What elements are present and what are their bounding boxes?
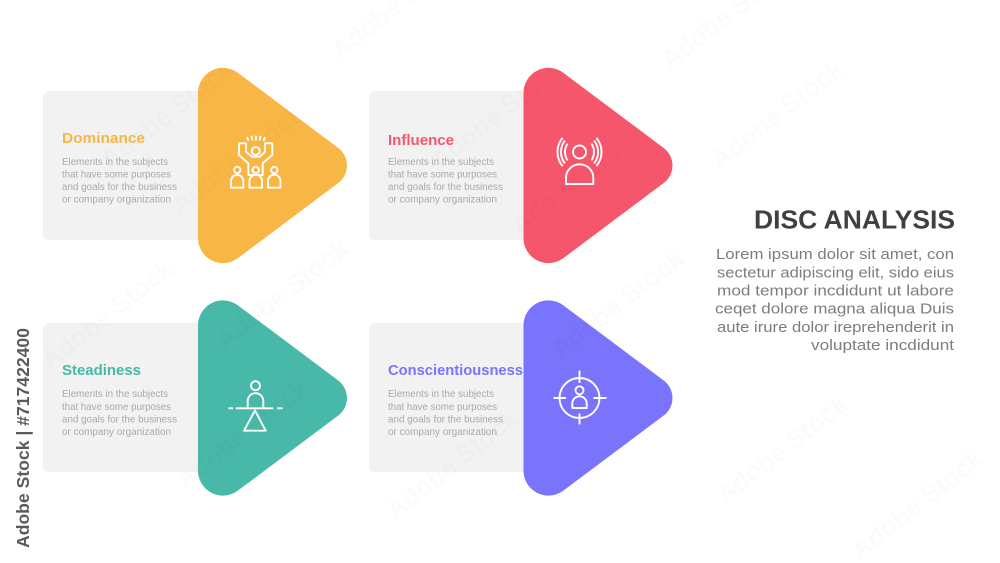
card background — [369, 91, 544, 240]
triangle arrow — [523, 300, 672, 496]
description text block — [715, 246, 955, 354]
watermark: Adobe Stock — [170, 373, 314, 495]
body text: that have some purposes — [388, 168, 497, 180]
body text: and goals for the business — [62, 414, 177, 426]
side credit text: Adobe Stock | #717422400 — [13, 328, 33, 548]
title: DISC ANALYSIS — [754, 204, 955, 234]
triangle arrow — [198, 68, 347, 263]
description text block: Lorem ipsum dolor sit amet, con — [716, 246, 954, 263]
watermark: Adobe Stock — [95, 53, 239, 175]
body text: Elements in the subjects — [388, 156, 494, 168]
body text: Elements in the subjects — [62, 156, 168, 168]
body text: or company organization — [388, 426, 497, 438]
watermark: Adobe Stock — [545, 243, 689, 365]
card background — [43, 323, 218, 472]
watermark: Adobe Stock — [35, 253, 179, 375]
body text — [62, 388, 177, 438]
heading: Conscientiousness — [388, 363, 523, 379]
panel: Dominance — [43, 68, 347, 263]
watermark: Adobe Stock — [380, 403, 524, 525]
description text block: sectetur adipiscing elit, sido eius — [717, 264, 954, 282]
body text: or company organization — [62, 194, 171, 206]
panel: Steadiness — [43, 300, 347, 496]
panel: Conscientiousness — [369, 300, 672, 496]
description text block: mod tempor incdidunt ut labore — [717, 282, 954, 300]
icon: raised arms leader with team — [231, 136, 280, 188]
body text: Elements in the subjects — [62, 388, 168, 400]
description text block: voluptate incdidunt — [811, 337, 955, 354]
panel: Influence — [369, 68, 672, 263]
description text block: aute irure dolor ireprehenderit in — [717, 319, 954, 336]
icon: person balancing on a scale — [228, 381, 283, 431]
icon: person broadcasting signal — [557, 138, 602, 184]
card background — [369, 323, 544, 472]
triangle arrow — [523, 68, 672, 263]
watermark: Adobe Stock — [845, 443, 989, 563]
card background — [43, 91, 218, 240]
heading: Dominance — [62, 131, 145, 147]
body text: that have some purposes — [388, 401, 497, 413]
watermark: Adobe Stock — [210, 233, 354, 355]
body text: that have some purposes — [62, 168, 171, 180]
body text: and goals for the business — [62, 181, 177, 193]
body text: Elements in the subjects — [388, 388, 494, 400]
watermark: Adobe Stock — [425, 53, 569, 175]
body text: or company organization — [62, 426, 171, 438]
watermark: Adobe Stock — [165, 98, 309, 220]
body text: and goals for the business — [388, 414, 503, 426]
description text block: ceqet dolore magna aliqua Duis — [715, 300, 954, 318]
watermark: Adobe Stock — [705, 53, 849, 175]
body text — [62, 156, 177, 206]
watermark: Adobe Stock — [710, 388, 854, 510]
body text — [388, 156, 503, 206]
body text: or company organization — [388, 194, 497, 206]
body text: and goals for the business — [388, 181, 503, 193]
heading: Steadiness — [62, 363, 141, 379]
heading: Influence — [388, 133, 454, 149]
body text — [388, 388, 503, 438]
body text: that have some purposes — [62, 401, 171, 413]
triangle arrow — [198, 300, 347, 496]
watermark: Adobe Stock — [505, 118, 649, 240]
icon: person in target crosshair — [554, 370, 606, 424]
